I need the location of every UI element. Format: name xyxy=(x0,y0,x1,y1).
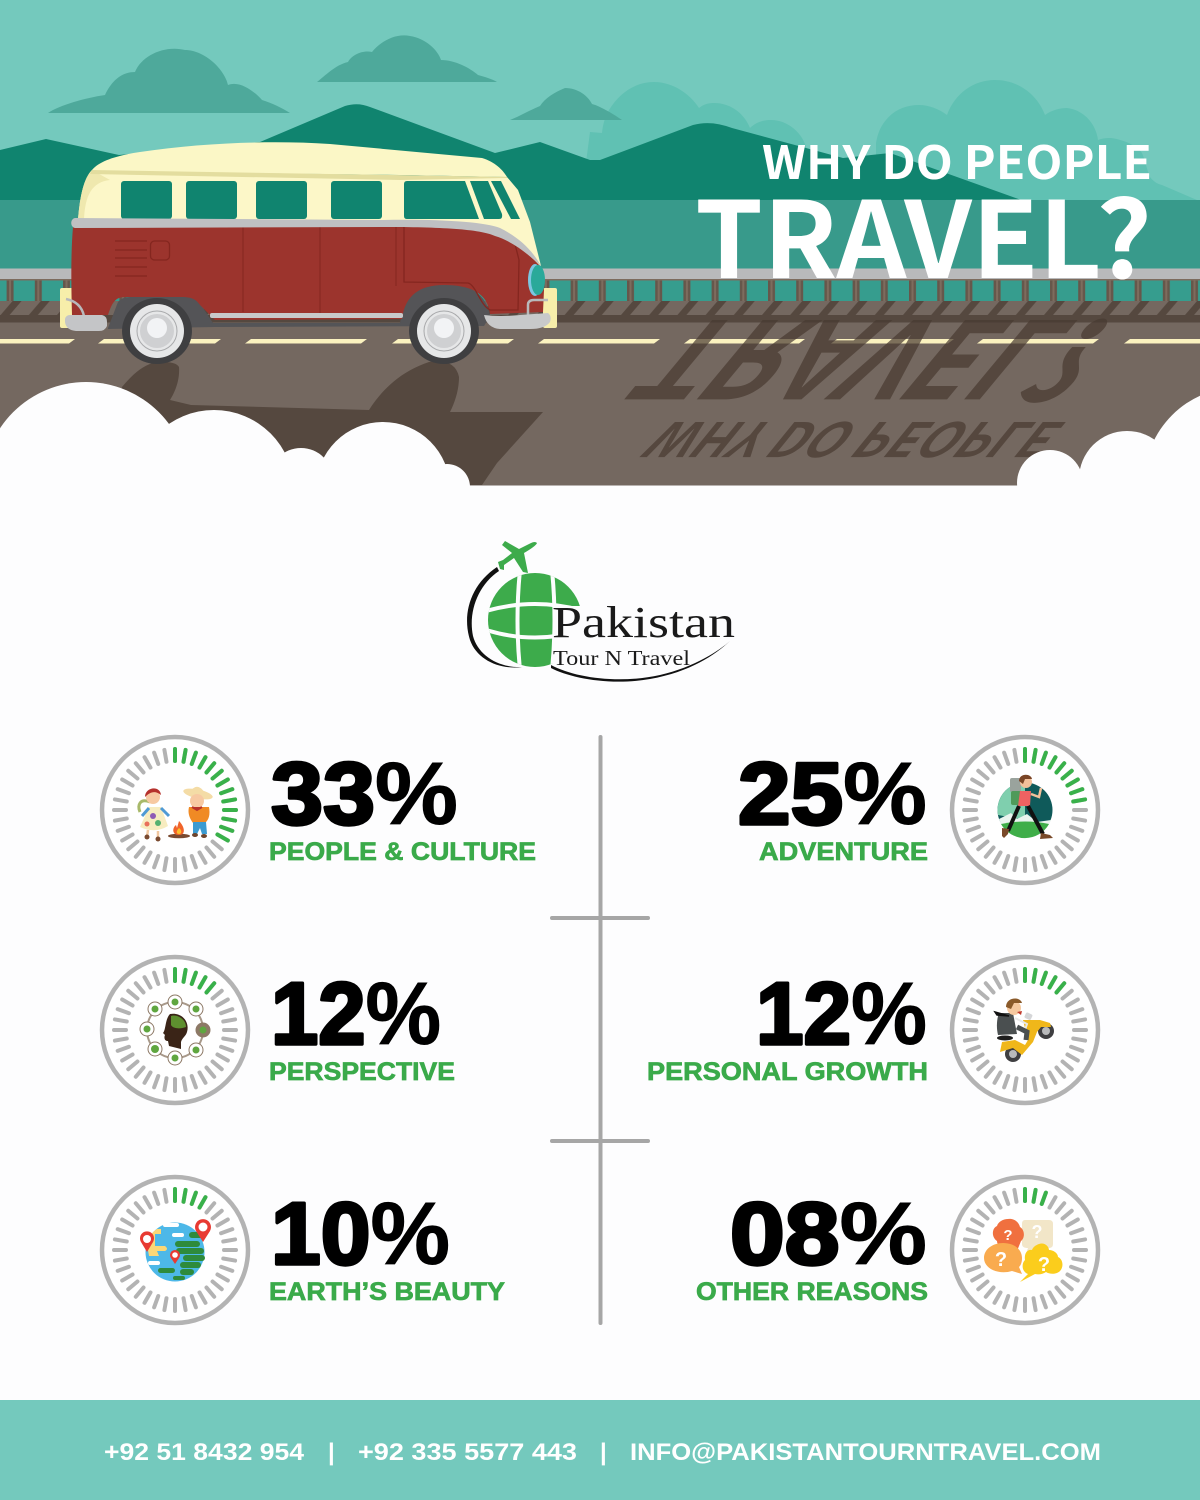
stat: adventure xyxy=(738,737,1098,883)
roof xyxy=(92,142,507,177)
front bumper xyxy=(484,300,551,329)
road dashes xyxy=(0,339,1200,344)
footer band xyxy=(0,1400,1200,1500)
label perspective: PERSPECTIVE xyxy=(269,1058,455,1086)
gauge 33 percent xyxy=(102,737,248,883)
stat: people and culture xyxy=(102,737,536,883)
lake xyxy=(0,200,1200,270)
stat: earth's beauty xyxy=(102,1177,505,1323)
headlight xyxy=(528,264,545,296)
upper body xyxy=(78,170,541,266)
sky xyxy=(0,0,1200,201)
label other reasons: OTHER REASONS xyxy=(696,1278,928,1306)
road xyxy=(0,301,1200,486)
rear bumper bracket xyxy=(60,288,74,328)
value 08%: 08% xyxy=(730,1184,927,1283)
logo xyxy=(467,541,735,682)
side body seams xyxy=(115,226,519,318)
value 33%: 33% xyxy=(271,744,458,843)
separator: | xyxy=(600,1439,607,1466)
logo lower swoosh xyxy=(551,641,730,682)
phone two: +92 335 5577 443 xyxy=(358,1439,577,1466)
wheel arches and skirt xyxy=(108,283,490,329)
label adventure: ADVENTURE xyxy=(759,838,928,866)
stat: perspective xyxy=(102,957,455,1103)
logo orbit swoosh xyxy=(467,567,522,668)
gauge 8 percent xyxy=(952,1177,1098,1323)
label earth's beauty: EARTH’S BEAUTY xyxy=(269,1278,505,1306)
rear wheel xyxy=(122,298,192,364)
front bumper bracket xyxy=(543,288,557,328)
gauge 12 percent xyxy=(102,957,248,1103)
railing posts xyxy=(0,279,1200,301)
chrome side strip xyxy=(210,313,403,318)
clouds bottom left xyxy=(0,382,470,588)
title: WHY DO PEOPLE xyxy=(762,127,1152,193)
chrome belt line xyxy=(71,218,541,266)
separator: | xyxy=(328,1439,335,1466)
label personal growth: PERSONAL GROWTH xyxy=(647,1058,928,1086)
white body panel xyxy=(0,486,1200,1400)
title reflection on road: TRAVEL? xyxy=(584,289,1156,443)
icon: man on scooter xyxy=(995,998,1054,1062)
icon: question speech bubbles: ? xyxy=(1003,1227,1013,1244)
gauge 10 percent xyxy=(102,1177,248,1323)
dark cloud small xyxy=(510,88,622,120)
title reflection on road: WHY DO PEOPLE xyxy=(622,408,1080,477)
railing base stripes xyxy=(0,301,1200,315)
header scene xyxy=(0,0,1200,486)
camper van xyxy=(60,142,557,364)
icon: dancing children and campfire xyxy=(139,786,214,842)
label people and culture: PEOPLE & CULTURE xyxy=(269,838,536,866)
bus shadow xyxy=(100,361,543,485)
value 12%: 12% xyxy=(756,964,927,1063)
logo plane xyxy=(498,541,537,573)
value 12%: 12% xyxy=(271,964,441,1063)
icon: head with green ideas xyxy=(140,995,210,1065)
dark cloud middle xyxy=(317,35,497,82)
stat: other reasons xyxy=(696,1177,1098,1323)
rear bumper xyxy=(65,299,107,331)
center divider xyxy=(552,737,648,1323)
icon: globe with map pins xyxy=(140,1219,211,1282)
phone one: +92 51 8432 954 xyxy=(104,1439,305,1466)
water behind railing xyxy=(0,279,1200,301)
email: INFO@PAKISTANTOURNTRAVEL.COM xyxy=(630,1439,1101,1466)
lower red body xyxy=(71,224,544,320)
front wheel xyxy=(409,298,479,364)
value 10%: 10% xyxy=(271,1184,450,1283)
footer xyxy=(0,1400,1200,1500)
gauge 12 percent xyxy=(952,957,1098,1103)
icon: question speech bubbles xyxy=(984,1219,1062,1282)
icon: question speech bubbles: ? xyxy=(995,1249,1007,1271)
railing top bar xyxy=(0,268,1200,279)
clouds bottom right xyxy=(1017,387,1200,579)
value 25%: 25% xyxy=(738,744,927,843)
icon: question speech bubbles: ? xyxy=(1032,1222,1042,1242)
logo globe xyxy=(488,573,580,667)
dark cloud left xyxy=(48,49,290,113)
icon: hiker xyxy=(998,775,1053,839)
gauge 25 percent xyxy=(952,737,1098,883)
windows xyxy=(121,181,520,219)
light clouds on the right xyxy=(585,80,1200,201)
title: TRAVEL? xyxy=(695,155,1152,309)
stat: personal growth xyxy=(647,957,1098,1103)
logo wordmark: Pakistan xyxy=(552,598,735,647)
logo tagline: Tour N Travel xyxy=(553,646,690,670)
icon: question speech bubbles: ? xyxy=(1038,1254,1050,1276)
mountains xyxy=(0,104,1024,201)
